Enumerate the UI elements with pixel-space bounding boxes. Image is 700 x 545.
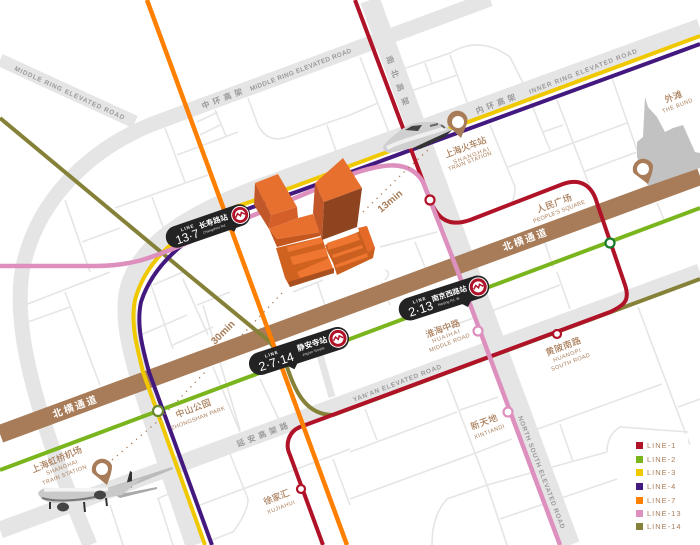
legend: LINE-3 [647, 468, 676, 477]
place labels: SOUTH ROAD [551, 353, 591, 373]
pin centre [637, 163, 649, 175]
place labels: 黄陂南路 [544, 334, 582, 358]
road labels: YAN'AN ELEVATED ROAD [352, 364, 443, 404]
station markers [153, 196, 614, 493]
line 3 [133, 36, 700, 545]
legend [622, 434, 688, 536]
station pill: jing'an temple: LINE [264, 349, 279, 359]
station pill: changshou road [163, 201, 254, 254]
building complex [254, 158, 375, 287]
road labels: INNER RING ELEVATED ROAD [528, 48, 638, 96]
legend: LINE-14 [647, 522, 682, 531]
station pill: jing'an temple: 2·7·14 [257, 350, 296, 374]
place labels: 新天地 [469, 412, 499, 432]
station pill: changshou road: 13·7 [174, 226, 201, 247]
station pill: west nanjing road [396, 273, 494, 328]
corridor labels: 北横通道 [51, 393, 98, 421]
place labels: 中山公园 [174, 396, 212, 420]
legend: LINE-2 [647, 455, 676, 464]
line 4 [139, 44, 700, 545]
station pill: west nanjing road: LINE [412, 296, 427, 305]
icon: high-speed train [383, 122, 452, 153]
place labels: PEOPLE'S SQUARE [533, 199, 586, 225]
place labels: ZHONGSHAN PARK [171, 406, 226, 432]
station pill: jing'an temple: Jing'an Temple [302, 346, 325, 357]
place labels: TRAIN STATION [448, 151, 493, 173]
station pill: changshou road: LINE [180, 223, 195, 232]
pin: hongqiao airport [92, 459, 112, 485]
icon: the bund skyline [637, 97, 700, 186]
travel time labels: 13min [376, 188, 405, 215]
line 14 [0, 118, 700, 415]
road labels: NORTH SOUTH ELEVATED ROAD [516, 415, 566, 530]
place labels: XUJIAHUI [267, 500, 296, 516]
corridor labels: 北横通道 [501, 226, 548, 254]
legend: LINE-7 [647, 496, 676, 505]
station pill: jing'an temple: 静安寺站 [296, 334, 329, 353]
station pill: changshou road: 长寿路站 [197, 211, 229, 231]
place labels: HUAIHAI [432, 329, 461, 345]
north-south corridor band [0, 176, 700, 434]
place labels: 上海虹桥机场 [29, 444, 83, 475]
line 1 [288, 0, 627, 545]
road labels: 延安高架路 [235, 420, 289, 449]
road labels: 内环高架 [474, 91, 517, 116]
line 13 [0, 165, 560, 545]
place labels: HUANGPI [553, 348, 582, 364]
station pill: jing'an temple [246, 324, 353, 382]
road labels [13, 48, 638, 530]
road labels: MIDDLE RING ELEVATED ROAD [249, 48, 353, 93]
place labels [29, 88, 694, 516]
road: connector [320, 355, 332, 397]
icon: airplane [38, 467, 173, 512]
place labels: XINTIANDI [474, 424, 506, 441]
road labels: 中环高架 [200, 86, 244, 111]
road: yan'an elevated [0, 272, 700, 530]
pin: the bund [633, 159, 653, 184]
dotted route 13min [363, 150, 428, 212]
station pill: changshou road: Changshou Rd. [202, 223, 227, 235]
road labels: 南北高架 [384, 54, 411, 107]
station pill: west nanjing road: Nanjing Rd. W. [437, 296, 461, 307]
place labels: 淮海中路 [424, 317, 461, 340]
station pill: west nanjing road: 南京西路站 [430, 284, 469, 304]
line 2 [0, 208, 700, 470]
place labels: SHANGHAI [453, 146, 491, 166]
road labels: MIDDLE RING ELEVATED ROAD [13, 65, 126, 122]
legend: LINE-13 [647, 509, 682, 518]
station pill: west nanjing road: 2·13 [407, 299, 435, 320]
legend: LINE-4 [647, 482, 676, 491]
place labels: MIDDLE ROAD [429, 333, 471, 354]
road: inner ring elevated [127, 28, 700, 545]
place labels: 徐家汇 [262, 487, 291, 507]
road: north south elevated [370, 0, 570, 545]
travel time labels: 30min [209, 319, 238, 347]
place labels: 人民广场 [535, 191, 573, 215]
pin centre [96, 463, 108, 475]
place labels: 上海火车站 [443, 134, 488, 160]
place labels: 外滩 [663, 88, 684, 105]
travel time labels [209, 188, 405, 347]
corridor labels [51, 226, 548, 421]
pin centre [452, 116, 464, 128]
legend: LINE-1 [647, 441, 676, 450]
dotted route 30min [112, 292, 283, 460]
line 7 [147, 0, 347, 545]
place labels: SHANGHAI [46, 459, 79, 477]
place labels: TRAIN STATION [42, 464, 88, 487]
place labels: THE BUND [662, 98, 694, 115]
pin: shanghai railway station [447, 111, 468, 138]
